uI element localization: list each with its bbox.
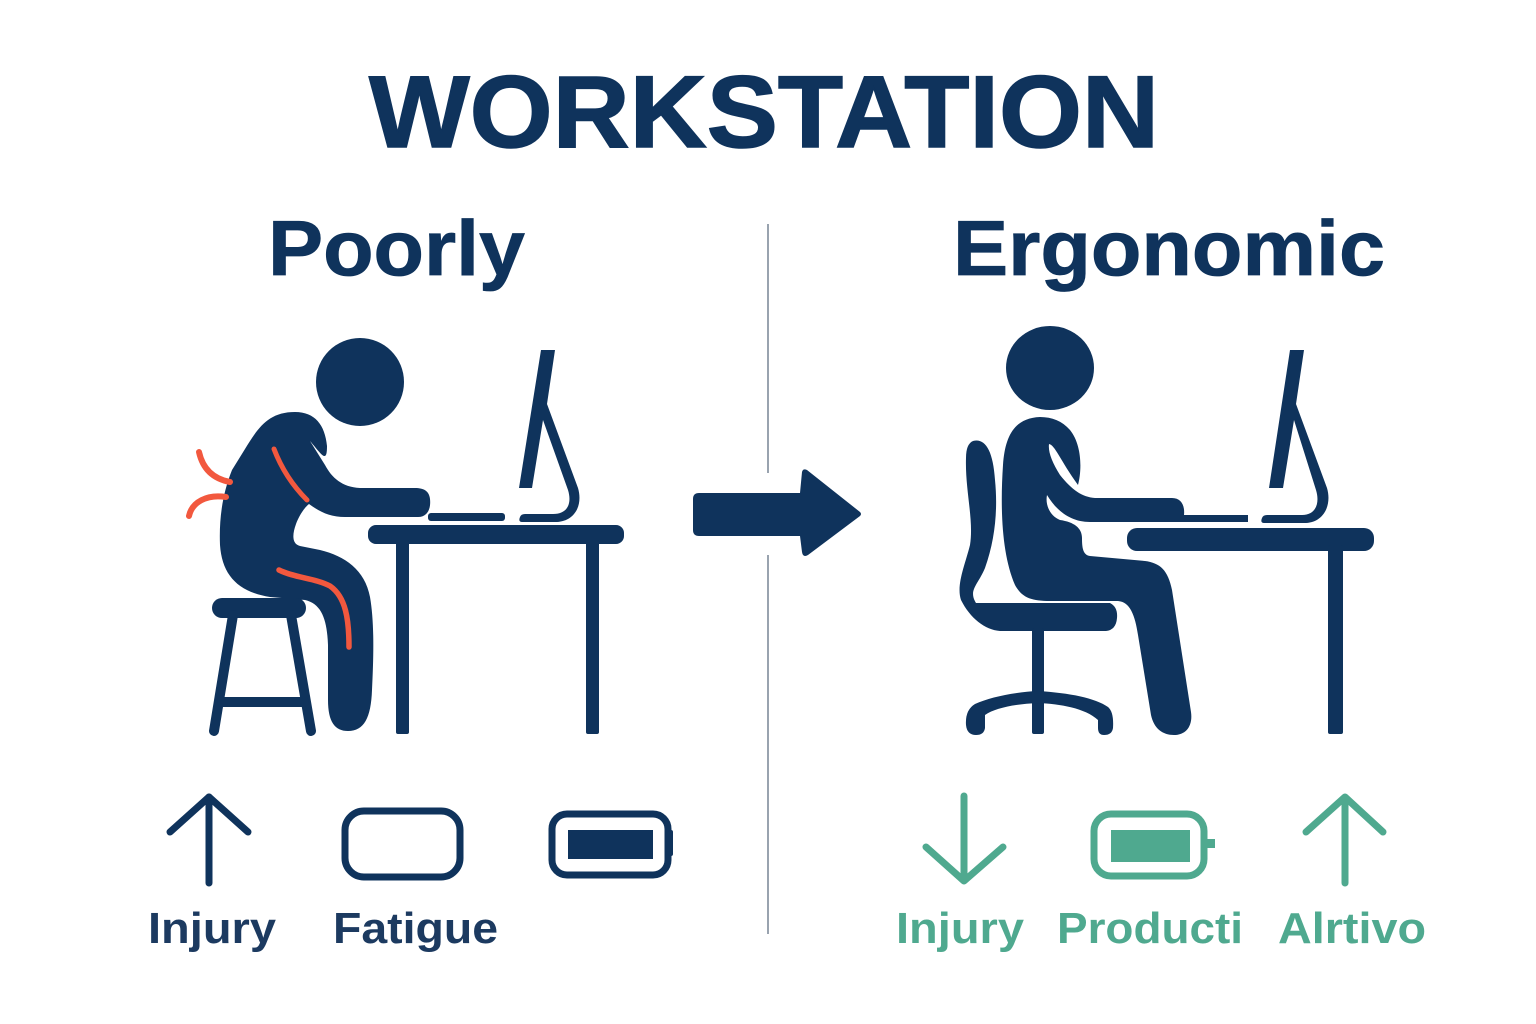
icon: full box xyxy=(552,814,673,875)
icon: office chair xyxy=(960,441,1117,735)
label: Producti: Producti xyxy=(1057,904,1243,953)
label: Injury: Injury xyxy=(148,904,277,953)
icon: poor posture head xyxy=(316,338,404,426)
icon: keyboard xyxy=(428,513,505,521)
icon: empty battery xyxy=(345,811,460,877)
icon: monitor xyxy=(519,350,579,522)
icon: injury up arrow xyxy=(170,797,248,883)
figure: poor posture workstation xyxy=(189,338,624,734)
icon: monitor xyxy=(1261,350,1328,523)
center divider xyxy=(767,224,769,934)
icon: stool xyxy=(214,608,311,731)
icon: upright head xyxy=(1006,326,1094,410)
label: Fatigue: Fatigue xyxy=(333,904,498,953)
icon: desk xyxy=(1127,528,1374,734)
icon: upright body xyxy=(1002,417,1248,735)
label: Injury green: Injury xyxy=(896,904,1025,953)
label: Alrtivo: Alrtivo xyxy=(1278,904,1426,953)
title: WORKSTATION xyxy=(369,55,1159,169)
icon: slouched body xyxy=(220,412,430,731)
figure: ergonomic workstation xyxy=(960,326,1374,735)
icon: pain marks xyxy=(189,452,230,516)
icon: injury down arrow xyxy=(926,796,1003,881)
icon: up arrow green xyxy=(1306,797,1383,883)
icon: full battery xyxy=(1094,814,1215,876)
heading: Poorly: Poorly xyxy=(268,204,525,292)
icon: desk xyxy=(368,525,624,734)
arrow: transition xyxy=(693,469,861,556)
icon: back strain line xyxy=(274,449,307,500)
icon: leg strain line xyxy=(279,570,349,647)
heading: Ergonomic: Ergonomic xyxy=(953,204,1385,292)
